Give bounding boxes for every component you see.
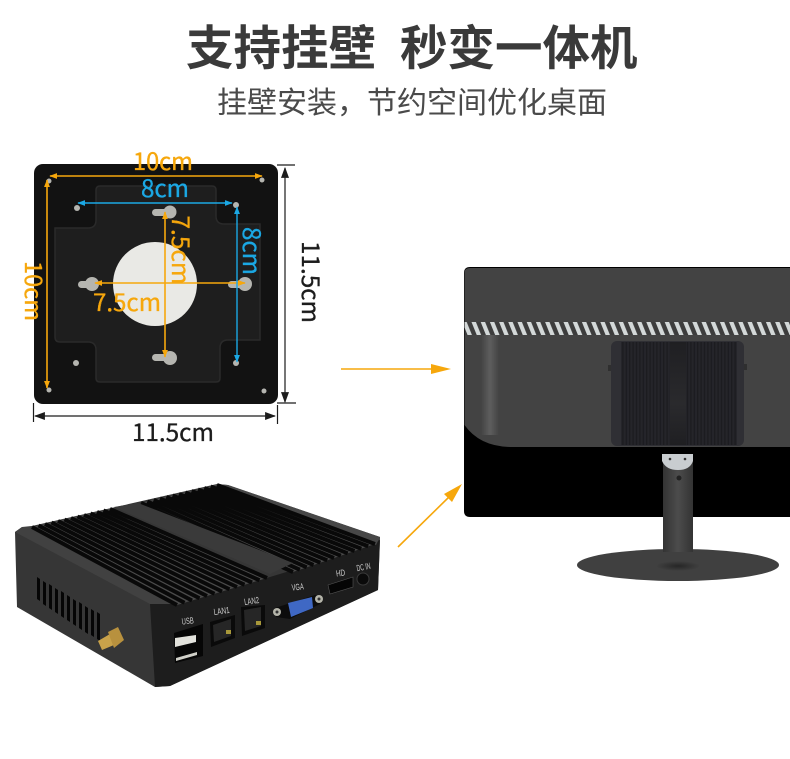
lan ports	[210, 605, 265, 647]
monitor stand column	[663, 460, 693, 552]
port labels: HD	[335, 567, 346, 579]
label: 10cm left: 10cm	[18, 261, 52, 321]
port labels: DC IN	[356, 561, 371, 573]
label: 8cm right: 8cm	[236, 227, 271, 275]
label: 10cm top: 10cm	[133, 142, 193, 177]
blue dimension arrows	[78, 203, 237, 362]
label: 7.5cm vertical: 7.5cm	[165, 215, 200, 285]
heat sink fins	[32, 485, 375, 605]
plate body	[34, 164, 278, 404]
label: 11.5cm bottom: 11.5cm	[132, 413, 214, 448]
antenna connector	[98, 627, 124, 650]
port labels: USB	[181, 615, 194, 627]
stand bracket	[662, 454, 693, 480]
mini pc on monitor	[608, 341, 747, 446]
vga port	[273, 595, 323, 619]
port labels: VGA	[291, 581, 304, 593]
panel: mounting plate with dimensions	[18, 142, 330, 448]
port labels: LAN2	[243, 595, 260, 607]
label: 7.5cm horizontal: 7.5cm	[93, 283, 161, 318]
black dimension arrows	[34, 165, 296, 424]
pc body	[15, 484, 380, 687]
port labels: LAN1	[213, 605, 230, 617]
arrow: plate to monitor	[341, 364, 451, 374]
title: 秒变一体机	[400, 10, 638, 79]
monitor back	[464, 267, 790, 517]
title: 支持挂壁	[186, 10, 376, 79]
port labels	[181, 561, 371, 627]
label: 11.5cm right: 11.5cm	[295, 241, 330, 323]
label: 8cm top: 8cm	[141, 169, 189, 204]
usb ports	[174, 624, 203, 663]
subtitle: 挂壁安装，节约空间优化桌面	[217, 78, 607, 122]
dc in port	[357, 573, 369, 585]
monitor stand base	[577, 549, 779, 581]
panel: mini pc product	[15, 484, 380, 687]
panel: monitor rear with mini pc mounted	[464, 267, 790, 581]
arrow: mini pc to monitor	[398, 484, 462, 547]
mounting holes	[46, 178, 266, 394]
hdmi port	[328, 577, 353, 594]
orange dimension arrows	[47, 176, 262, 388]
side vents	[37, 577, 100, 641]
